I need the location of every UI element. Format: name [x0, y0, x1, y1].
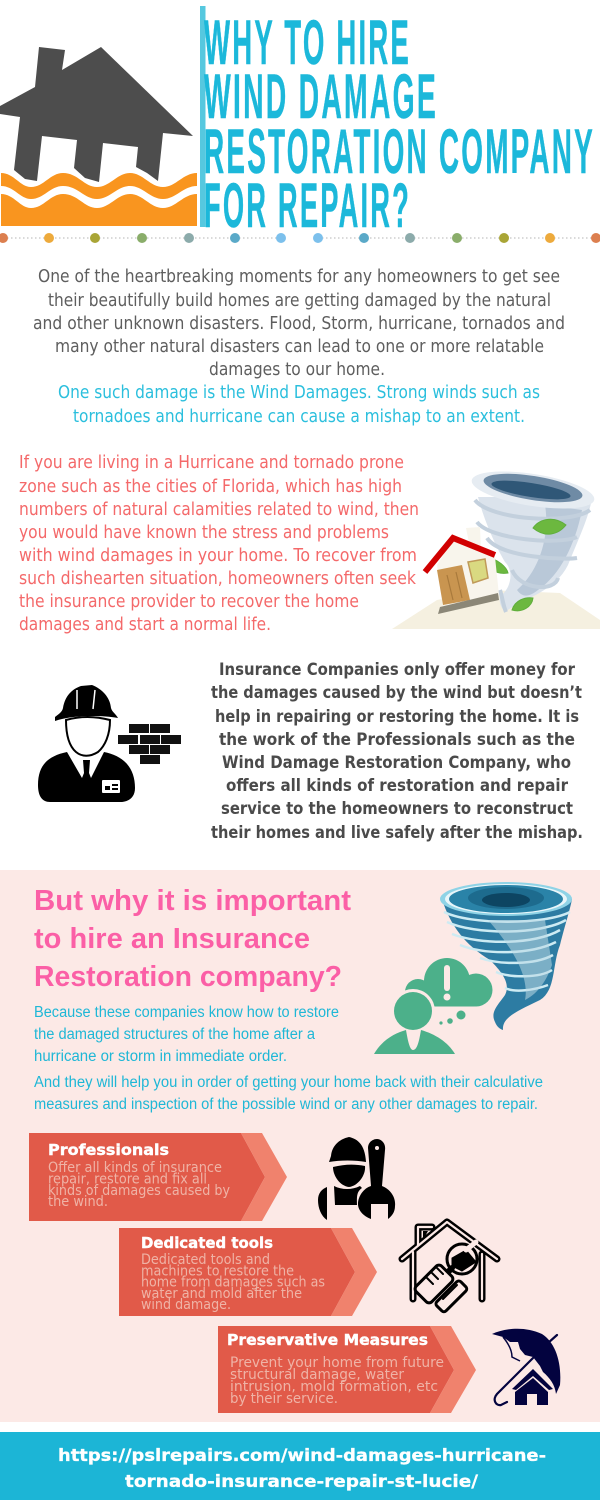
arrow card: professionals: Offer all kinds of insurance: [48, 1160, 222, 1176]
red paragraph: damages and start a normal life.: [19, 615, 271, 635]
icon: house in flood water: [0, 47, 197, 226]
panel paragraph: hurricane or storm in immediate order.: [34, 1048, 287, 1065]
arrow card: professionals: Professionals: [48, 1141, 169, 1159]
icon: tornado hitting house: [392, 464, 600, 629]
panel: why it is important: [0, 870, 600, 1422]
footer link: https://pslrepairs.com/wind-damages-hurricane-: [58, 1446, 546, 1466]
panel heading: [34, 885, 351, 993]
panel heading: But why it is important: [34, 885, 351, 917]
footer link: [58, 1446, 546, 1492]
arrow card: professionals: kinds of damages caused by: [48, 1183, 230, 1199]
arrow card: dedicated tools: machines to restore the: [141, 1263, 294, 1279]
arrow card: preservative measures: Prevent your home from future: [230, 1355, 444, 1371]
intro highlight text: [58, 383, 540, 427]
bold insurance paragraph: [211, 660, 583, 843]
red paragraph: you would have known the stress and problems: [19, 523, 389, 543]
panel paragraph: And they will help you in order of getting your home back with their calculative: [34, 1074, 543, 1091]
panel paragraph: Because these companies know how to restore: [34, 1004, 339, 1021]
panel heading: Restoration company?: [34, 961, 342, 993]
red paragraph: the insurance provider to recover the home: [19, 592, 359, 612]
footer bar: [0, 1432, 600, 1500]
arrow card: dedicated tools: water and mold after the: [141, 1286, 302, 1302]
icon: house with tools: [402, 1222, 497, 1313]
arrow card: professionals: [29, 1133, 287, 1221]
arrow card: dedicated tools: Dedicated tools and: [141, 1252, 270, 1268]
arrow card: preservative measures: intrusion, mold formation, etc: [230, 1379, 438, 1395]
icon: blue tornado: [440, 882, 572, 1030]
panel paragraph: [34, 1004, 543, 1113]
icon: umbrella over house: [492, 1329, 560, 1405]
panel heading: to hire an Insurance: [34, 923, 310, 955]
red paragraph: zone such as the cities of Florida, which has high: [19, 477, 402, 497]
arrow card: dedicated tools: Dedicated tools: [141, 1234, 273, 1252]
red paragraph: [19, 453, 419, 635]
intro paragraph: many other natural disasters can lead to one or more relatable: [55, 337, 544, 357]
arrow card: preservative measures: Preservative Measures: [227, 1331, 428, 1349]
red paragraph: such dishearten situation, homeowners often seek: [19, 569, 417, 589]
icon: worker with wrench: [318, 1137, 395, 1220]
red paragraph: If you are living in a Hurricane and tornado prone: [19, 453, 404, 473]
title bar: [200, 6, 206, 227]
dotted timeline divider: [0, 233, 600, 243]
arrow card: preservative measures: structural damage, water: [230, 1367, 404, 1383]
arrow card: dedicated tools: [119, 1228, 377, 1316]
arrow card: professionals: repair, restore and fix all: [48, 1172, 207, 1188]
arrow card: professionals: the wind.: [48, 1194, 108, 1210]
intro highlight text: One such damage is the Wind Damages. Strong winds such as: [58, 383, 540, 403]
arrow card: preservative measures: by their service.: [230, 1391, 338, 1407]
intro highlight text: tornadoes and hurricane can cause a mishap to an extent.: [73, 407, 525, 427]
red paragraph: with wind damages in your home. To recover from: [19, 546, 417, 566]
arrow card: preservative measures: [218, 1326, 476, 1413]
footer link: tornado-insurance-repair-st-lucie/: [125, 1472, 479, 1492]
title: [204, 8, 595, 241]
intro paragraph: damages to our home.: [209, 360, 385, 380]
red paragraph: numbers of natural calamities related to wind, then: [19, 500, 419, 520]
icon: construction worker with bricks: [38, 685, 181, 802]
panel paragraph: the damaged structures of the home after a: [34, 1026, 315, 1043]
icon: person with alert thought cloud: [374, 958, 492, 1054]
intro paragraph: [33, 267, 565, 380]
arrow card: dedicated tools: wind damage.: [141, 1297, 231, 1313]
arrow card: dedicated tools: home from damages such as: [141, 1274, 325, 1290]
panel paragraph: measures and inspection of the possible wind or any other damages to repair.: [34, 1096, 538, 1113]
